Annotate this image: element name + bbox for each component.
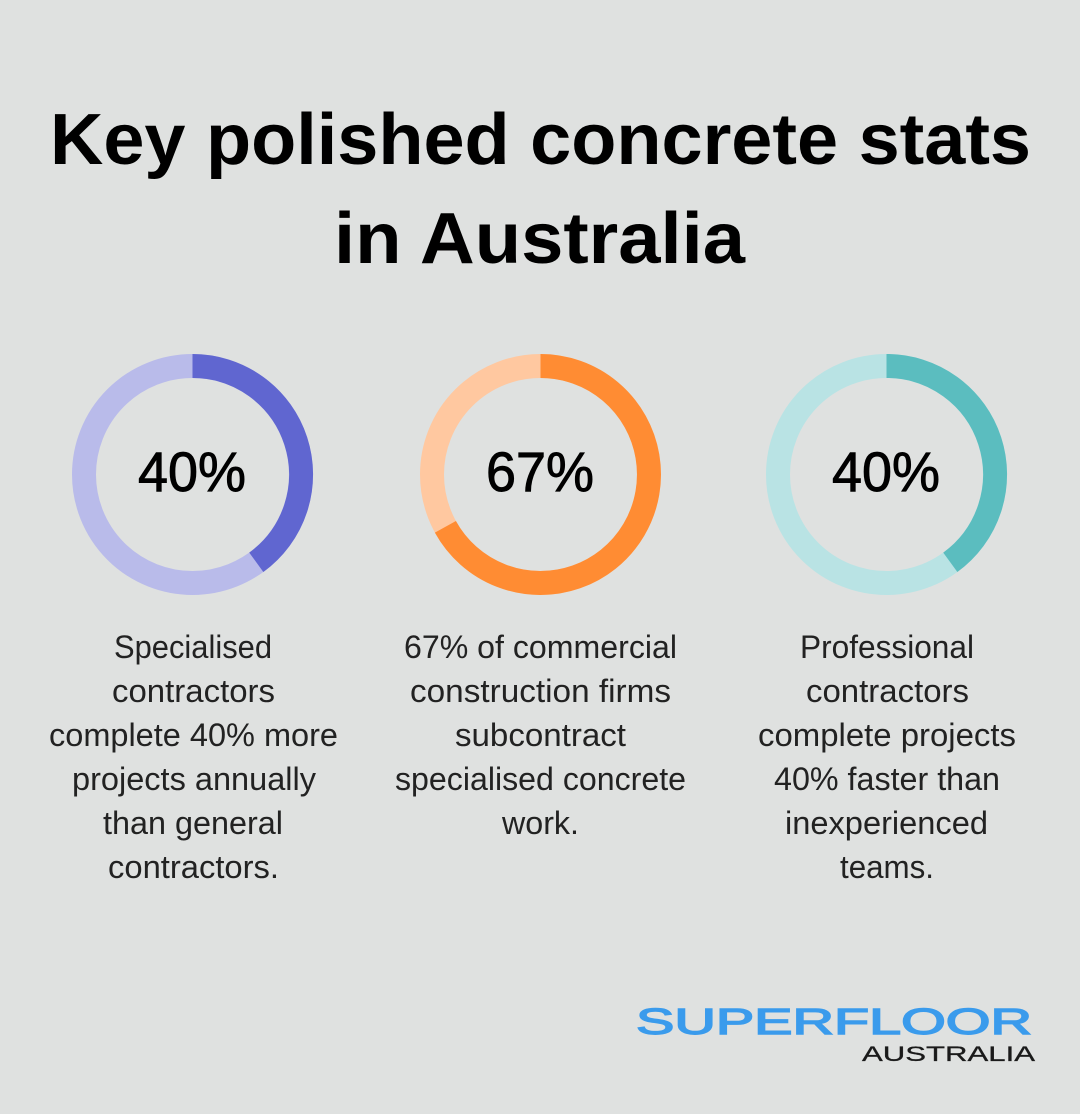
description text: 67% of commercial	[404, 629, 677, 665]
description text: specialised concrete	[395, 761, 686, 797]
donut chart: 40% teal	[778, 366, 995, 583]
description text: teams.	[840, 849, 934, 885]
description text: contractors	[112, 673, 275, 709]
description text: Professional	[800, 629, 974, 665]
logo: Superfloor Australia	[636, 1001, 1035, 1066]
donut chart: 67% orange	[432, 366, 649, 583]
logo: Superfloor Australia: SUPERFLOOR	[636, 1001, 1032, 1042]
description text	[758, 629, 1016, 885]
description text: work.	[501, 805, 579, 841]
stat value: 40%	[832, 440, 940, 503]
description text: inexperienced	[785, 805, 988, 841]
title: Key polished concrete stats	[50, 100, 1031, 180]
panel: professional contractors stat	[758, 366, 1016, 885]
logo: Superfloor Australia: AUSTRALIA	[862, 1043, 1035, 1066]
description text: complete projects	[758, 717, 1016, 753]
description text: projects annually	[72, 761, 316, 797]
stat value: 67%	[486, 440, 594, 503]
description text: contractors.	[108, 849, 279, 885]
description text: than general	[103, 805, 283, 841]
panel: specialised contractors stat	[49, 366, 338, 885]
title: in Australia	[334, 199, 746, 279]
description text: 40% faster than	[774, 761, 1000, 797]
title	[50, 100, 1031, 279]
description text: complete 40% more	[49, 717, 338, 753]
panel: commercial firms stat	[395, 366, 686, 841]
description text: subcontract	[455, 717, 626, 753]
description text	[49, 629, 338, 885]
description text: construction firms	[410, 673, 671, 709]
description text: contractors	[806, 673, 969, 709]
stat value: 40%	[138, 440, 246, 503]
description text: Specialised	[114, 629, 272, 665]
description text	[395, 629, 686, 841]
donut chart: 40% purple	[84, 366, 301, 583]
